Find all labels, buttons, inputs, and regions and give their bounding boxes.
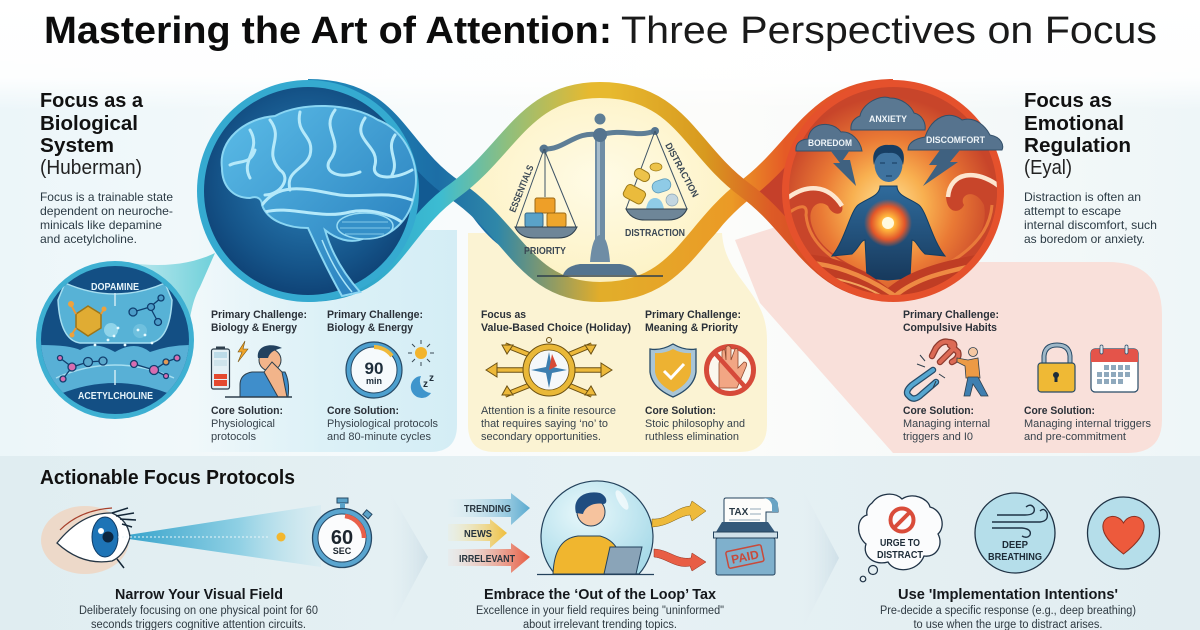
icon: deflected arrows	[652, 501, 706, 571]
column: value based choice: that requires saying ‘no’ to	[481, 418, 608, 430]
heading: focus as a biological system	[40, 90, 144, 179]
icon: compass with arrows	[486, 338, 612, 396]
cloud: boredom	[796, 124, 862, 186]
text: biological description	[40, 190, 173, 246]
column: value based choice: secondary opportunities.	[481, 431, 601, 443]
lower flowing bands	[811, 255, 974, 295]
molecule: lower right	[130, 355, 180, 378]
column: compulsive habits: Primary Challenge:	[903, 309, 999, 321]
column: biology and energy	[211, 309, 307, 443]
column: biology and energy: Biology & Energy	[211, 322, 298, 334]
cloud: discomfort	[908, 115, 1003, 186]
icon: eye beam	[115, 505, 321, 567]
text: emotional description	[1024, 190, 1157, 246]
column: biology and energy: Primary Challenge:	[211, 309, 307, 321]
cloud: anxiety: ANXIETY	[869, 114, 908, 125]
text: biological description: minicals like depamine	[40, 218, 162, 232]
icon: padlock	[1038, 345, 1075, 392]
icon: deep breathing: DEEP	[1002, 540, 1028, 551]
column: compulsive habits: Core Solution:	[903, 405, 974, 417]
title	[44, 10, 1157, 52]
heading: focus as a biological system: Focus as a	[40, 90, 144, 112]
molecule: top right	[129, 295, 164, 326]
protocol: narrow your visual field	[41, 498, 372, 630]
molecule: lower left	[58, 356, 107, 382]
protocol: narrow your visual field: Narrow Your Visual Field	[115, 586, 283, 603]
column: pre-commitment: Managing internal triggers	[1024, 418, 1151, 430]
column: ninety minute cycles	[327, 309, 438, 443]
icon: person in bubble	[537, 481, 654, 574]
connector from brain to neurochemicals	[123, 253, 215, 345]
icon: deep breathing	[975, 493, 1055, 573]
icon: 90 minute timer: min	[366, 376, 382, 386]
protocol: use implementation intentions: Pre-decide a specific response (e.g., deep breathing)	[880, 605, 1136, 617]
icon: neurochemical synapse circle: DOPAMINE	[91, 282, 139, 293]
protocol: embrace the out of the loop tax	[448, 481, 778, 630]
column: ninety minute cycles: Core Solution:	[327, 405, 399, 417]
text: emotional description: attempt to escape	[1024, 204, 1121, 218]
icon: moon and sleep: z	[423, 379, 428, 390]
column: value based choice: Attention is a finite resource	[481, 405, 616, 417]
protocol: use implementation intentions: Use 'Implementation Intentions'	[898, 586, 1118, 603]
molecule: hexagon	[68, 301, 106, 338]
protocol: embrace the out of the loop tax: Embrace the ‘Out of the Loop’ Tax	[484, 586, 717, 603]
cloud: boredom: BOREDOM	[808, 138, 852, 149]
heading: focus as emotional regulation	[1024, 90, 1131, 179]
panel: biological tint	[190, 230, 457, 452]
icon: moon and sleep: z	[429, 373, 434, 384]
icon: low battery and tired person	[212, 341, 292, 397]
column: ninety minute cycles: Primary Challenge:	[327, 309, 423, 321]
icon: eye	[41, 506, 136, 574]
ribbon: flowing band linking the three circles	[308, 86, 893, 296]
heading: focus as a biological system: (Huberman)	[40, 157, 142, 179]
text: emotional description: as boredom or anxiety.	[1024, 232, 1145, 246]
icon: neurochemical synapse circle: ACETYLCHOLINE	[78, 391, 153, 402]
protocol: embrace the out of the loop tax: Excellence in your field requires being "uninformed"	[476, 605, 724, 617]
column: compulsive habits: Compulsive Habits	[903, 322, 997, 334]
column: meaning and priority: Stoic philosophy and	[645, 418, 745, 430]
left pan with essentials blocks	[515, 198, 577, 238]
icon: incoming information arrows: NEWS	[464, 529, 492, 540]
icon: moon and sleep	[411, 373, 434, 398]
column: compulsive habits	[903, 309, 999, 443]
protocol: use implementation intentions	[859, 493, 1160, 630]
column: pre-commitment	[1024, 345, 1151, 443]
icon: 60 second stopwatch: 60	[331, 527, 353, 549]
column: compulsive habits: Managing internal	[903, 418, 990, 430]
column: pre-commitment: and pre-commitment	[1024, 431, 1126, 443]
heading: focus as emotional regulation: (Eyal)	[1024, 157, 1072, 179]
icon: tax box paid: PAID	[730, 547, 760, 567]
column: meaning and priority: ruthless elimination	[645, 431, 739, 443]
text: emotional description: Distraction is often an	[1024, 190, 1141, 204]
column: meaning and priority: Core Solution:	[645, 405, 716, 417]
column: biology and energy: Core Solution:	[211, 405, 283, 417]
figure	[832, 145, 945, 280]
column: ninety minute cycles: and 80-minute cycles	[327, 431, 431, 443]
icon: neurochemical synapse circle	[36, 261, 194, 425]
column: meaning and priority	[645, 309, 754, 443]
heading: actionable focus protocols: Actionable Focus Protocols	[40, 467, 295, 489]
column: ninety minute cycles: Physiological protocols	[327, 418, 438, 430]
icon: tax box paid	[714, 498, 778, 575]
text: biological description: and acetylcholine.	[40, 232, 137, 246]
icon: urge thought cloud	[859, 494, 942, 582]
panel: value-based tint	[468, 233, 767, 452]
icon: emotional turmoil circle	[770, 80, 1006, 305]
heading: focus as emotional regulation: Regulation	[1024, 135, 1131, 157]
column: pre-commitment: Core Solution:	[1024, 405, 1095, 417]
icon: heart	[1088, 497, 1160, 569]
icon: 60 second stopwatch	[312, 498, 372, 568]
icon: balance scale: DISTRACTION	[625, 228, 685, 239]
column: ninety minute cycles: Biology & Energy	[327, 322, 414, 334]
icon: balance scale	[508, 114, 700, 276]
icon: incoming information arrows	[448, 493, 530, 573]
icon: balance scale: DISTRACTION	[662, 141, 700, 199]
icon: tax box paid: TAX	[729, 507, 749, 518]
heading: focus as a biological system: Biological	[40, 113, 138, 135]
icon: incoming information arrows: TRENDING	[464, 504, 511, 515]
icon: 60 second stopwatch: SEC	[333, 546, 352, 556]
column: biology and energy: protocols	[211, 431, 256, 443]
column: value based choice	[481, 309, 631, 443]
text: biological description: Focus is a trainable state	[40, 190, 173, 204]
column: meaning and priority: Meaning & Priority	[645, 322, 739, 334]
panel: actionable focus protocols	[0, 456, 1200, 630]
column: value based choice: Value-Based Choice (Holiday)	[481, 322, 631, 334]
heading: focus as emotional regulation: Focus as	[1024, 90, 1112, 112]
heading: focus as emotional regulation: Emotional	[1024, 113, 1124, 135]
icon: sun	[408, 340, 434, 366]
right pan with distraction pills	[622, 163, 687, 220]
icon: breaking chain and person	[907, 342, 988, 399]
column: biology and energy: Physiological	[211, 418, 275, 430]
column: meaning and priority: Primary Challenge:	[645, 309, 741, 321]
icon: 90 minute timer	[346, 342, 402, 398]
column: value based choice: Focus as	[481, 309, 526, 321]
heading: focus as a biological system: System	[40, 135, 114, 157]
icon: urge thought cloud: DISTRACT	[877, 550, 923, 561]
icon: deep breathing: BREATHING	[988, 552, 1042, 563]
protocol: narrow your visual field: Deliberately focusing on one physical point for 60	[79, 605, 318, 617]
text: biological description: dependent on neuroche-	[40, 204, 173, 218]
icon: balance scale: PRIORITY	[524, 246, 566, 257]
icon: shield with check	[650, 344, 696, 397]
icon: stop hand	[706, 346, 754, 394]
icon: brain circle	[197, 80, 419, 302]
icon: balance scale: ESSENTIALS	[508, 164, 537, 214]
waves	[789, 172, 997, 274]
text: emotional description: internal discomfort, such	[1024, 218, 1157, 232]
column: compulsive habits: triggers and I0	[903, 431, 973, 443]
icon: 90 minute timer: 90	[365, 359, 383, 378]
icon: incoming information arrows: IRRELEVANT	[459, 554, 515, 565]
cloud: anxiety	[851, 97, 925, 130]
title: Three Perspectives on Focus	[621, 10, 1157, 52]
icon: urge thought cloud: URGE TO	[880, 538, 920, 549]
icon: calendar	[1091, 345, 1138, 392]
panel: emotional tint	[735, 200, 1162, 453]
title: Mastering the Art of Attention:	[44, 10, 612, 52]
cloud: discomfort: DISCOMFORT	[926, 135, 985, 146]
